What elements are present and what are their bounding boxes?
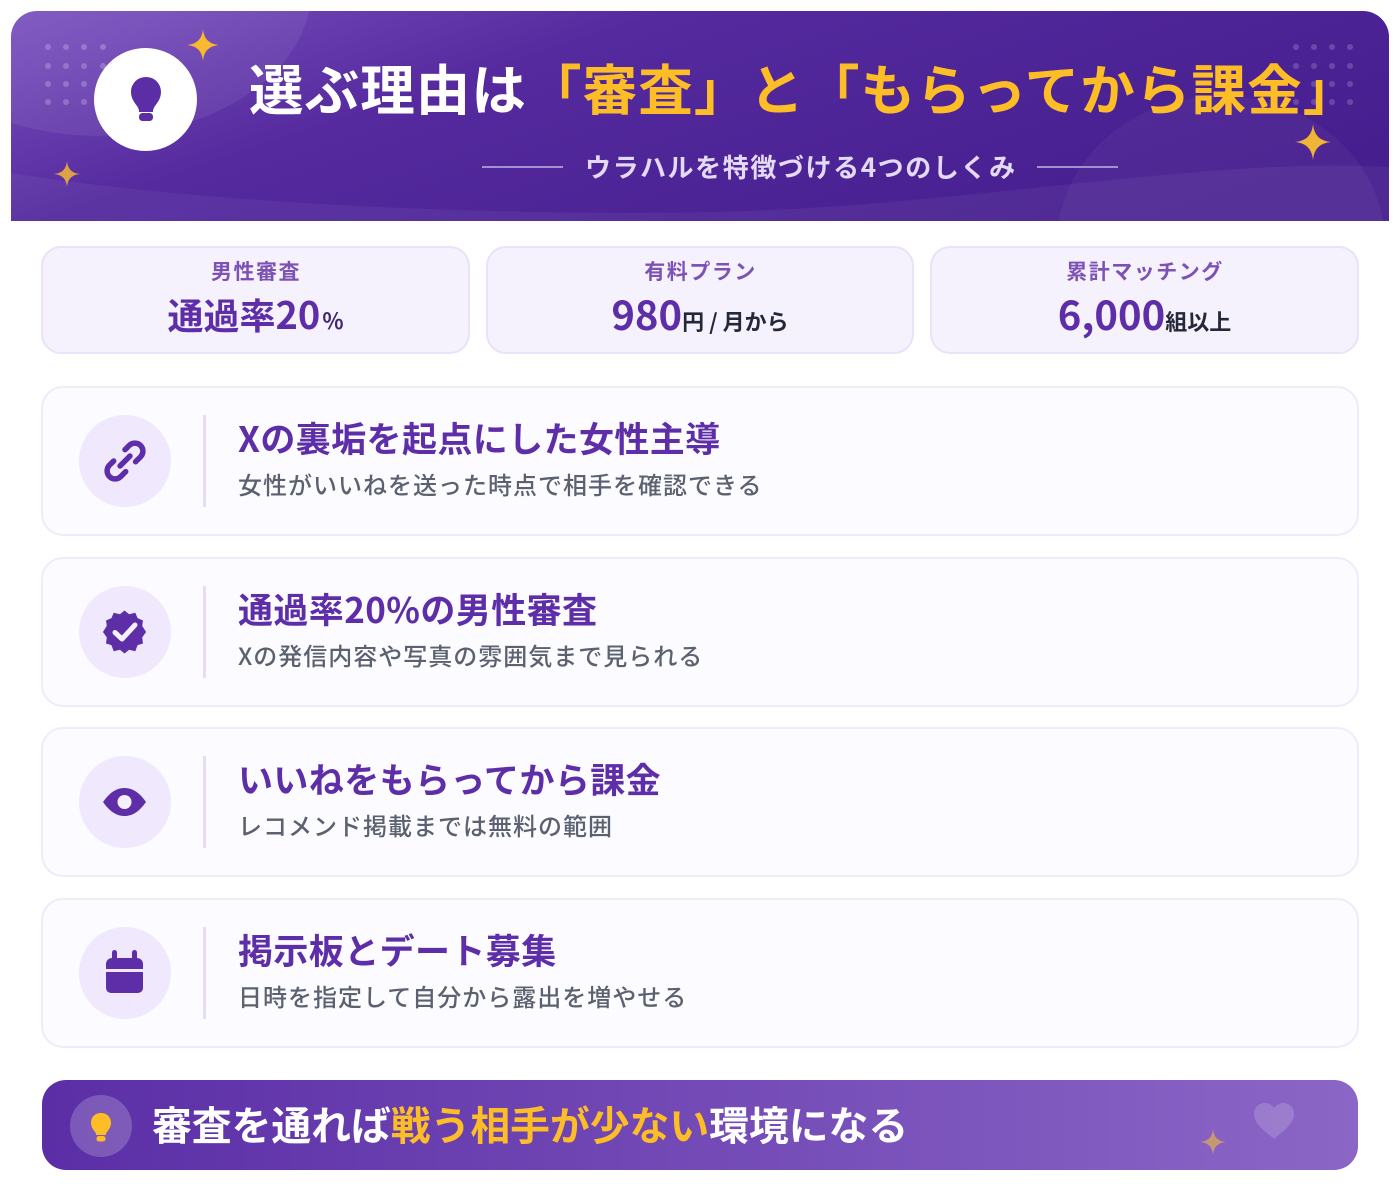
stat label: 累計マッチング [1066,256,1224,286]
subtitle with rules: ウラハルを特徴づける4つのしくみ [585,148,1017,185]
feature card: screening [41,557,1359,707]
divider [203,927,206,1019]
divider [203,586,206,678]
icon: verified badge [79,586,171,678]
heading: 通過率20%の男性審査 [238,583,597,634]
stat: paid plan [486,246,914,354]
stat value: 980円 / 月から [611,284,789,342]
heading: 掲示板とデート募集 [238,924,557,975]
icon: sparkle top [187,29,219,61]
description: 日時を指定して自分から露出を増やせる [238,978,687,1013]
icon: heart [1254,1103,1294,1139]
description: レコメンド掲載までは無料の範囲 [238,807,613,842]
stat value: 通過率20% [167,285,344,340]
icon: eye [79,756,171,848]
header background [11,11,1389,221]
conclusion banner [42,1080,1358,1170]
conclusion text: 審査を通れば戦う相手が少ない環境になる [152,1094,908,1152]
icon: sparkle [1200,1130,1226,1154]
icon: link [79,415,171,507]
title: 選ぶ理由は「審査」と「もらってから課金」 [249,47,1358,126]
stat: male screening [41,246,470,354]
stat label: 有料プラン [644,256,757,286]
icon: sparkle left [54,162,80,187]
icon: light bulb badge [94,48,197,151]
stat: cumulative matches [930,246,1359,354]
divider [203,415,206,507]
icon: sparkle right [1295,124,1331,160]
stat label: 男性審査 [211,256,301,286]
divider [203,756,206,848]
icon: calendar [79,927,171,1019]
feature card: pay after likes [41,727,1359,877]
heading: いいねをもらってから課金 [238,753,661,804]
stat value: 6,000組以上 [1058,284,1231,342]
feature card: women-led [41,386,1359,536]
description: Xの発信内容や写真の雰囲気まで見られる [238,637,703,672]
header banner [11,11,1389,221]
heading: Xの裏垢を起点にした女性主導 [238,412,721,463]
feature card: board and dates [41,898,1359,1048]
icon: bulb in circle [70,1095,132,1157]
description: 女性がいいねを送った時点で相手を確認できる [238,466,763,501]
